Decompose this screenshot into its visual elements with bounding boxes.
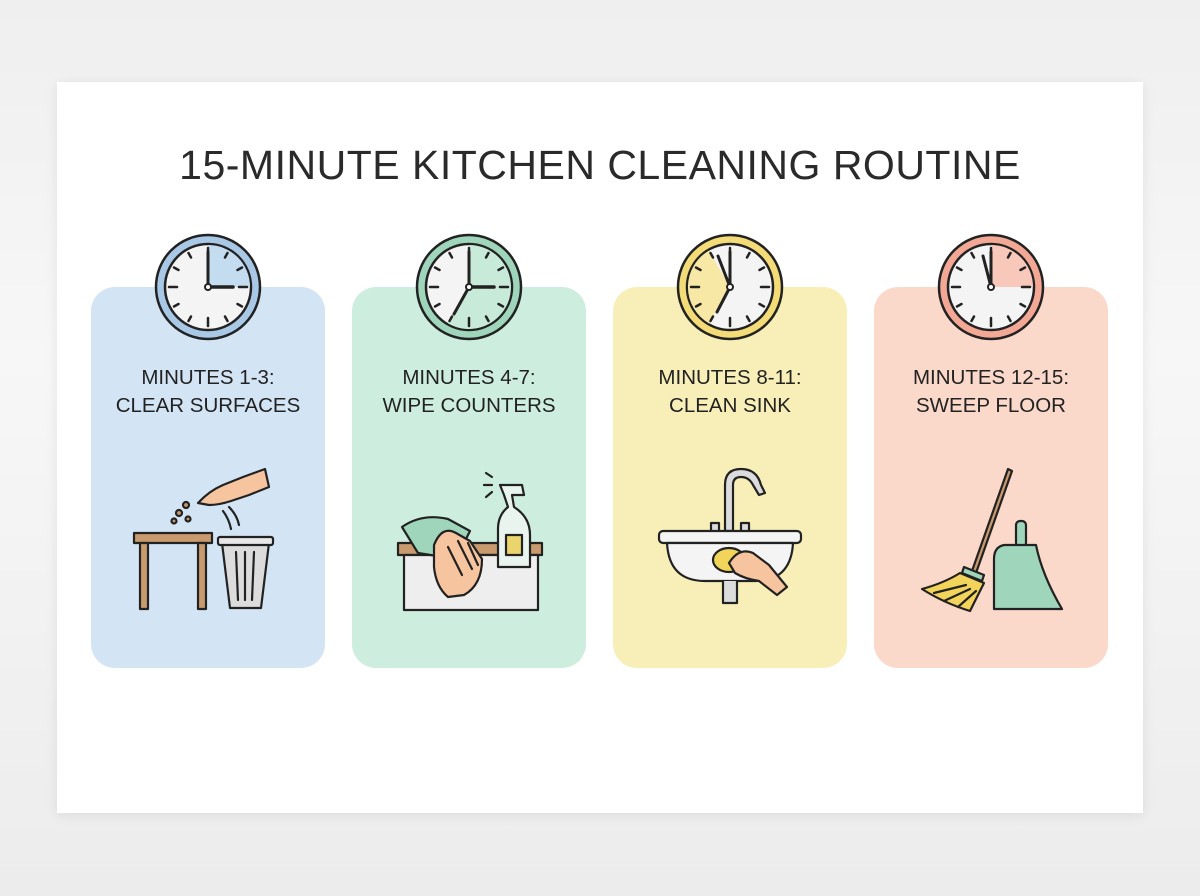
clock 2 — [416, 234, 522, 340]
label 1: MINUTES 1-3: — [141, 366, 275, 389]
label 2 — [382, 366, 556, 417]
white card — [57, 82, 1143, 813]
label 3: CLEAN SINK — [669, 394, 791, 417]
icon: hand wiping counter with spray bottle — [396, 472, 544, 612]
label 3 — [658, 366, 802, 417]
label 3: MINUTES 8-11: — [658, 366, 802, 389]
icon: broom and dustpan — [920, 468, 1064, 612]
label 4 — [913, 366, 1069, 417]
clock 4 — [938, 234, 1044, 340]
label 2: WIPE COUNTERS — [382, 394, 556, 417]
panel: minutes 12-15 — [874, 287, 1108, 668]
clock 3 — [676, 234, 784, 340]
label 1 — [116, 366, 300, 417]
panel: minutes 1-3 — [91, 287, 325, 668]
label 4: SWEEP FLOOR — [916, 394, 1066, 417]
panel: minutes 8-11 — [613, 287, 847, 668]
icon: table, hand and trash can — [132, 468, 274, 610]
clock 1 — [154, 234, 262, 340]
label 1: CLEAR SURFACES — [116, 394, 300, 417]
icon: faucet, sink and hand with sponge — [658, 468, 802, 604]
label 4: MINUTES 12-15: — [913, 366, 1069, 389]
title: 15-MINUTE KITCHEN CLEANING ROUTINE — [179, 142, 1021, 188]
panel: minutes 4-7 — [352, 287, 586, 668]
label 2: MINUTES 4-7: — [402, 366, 536, 389]
